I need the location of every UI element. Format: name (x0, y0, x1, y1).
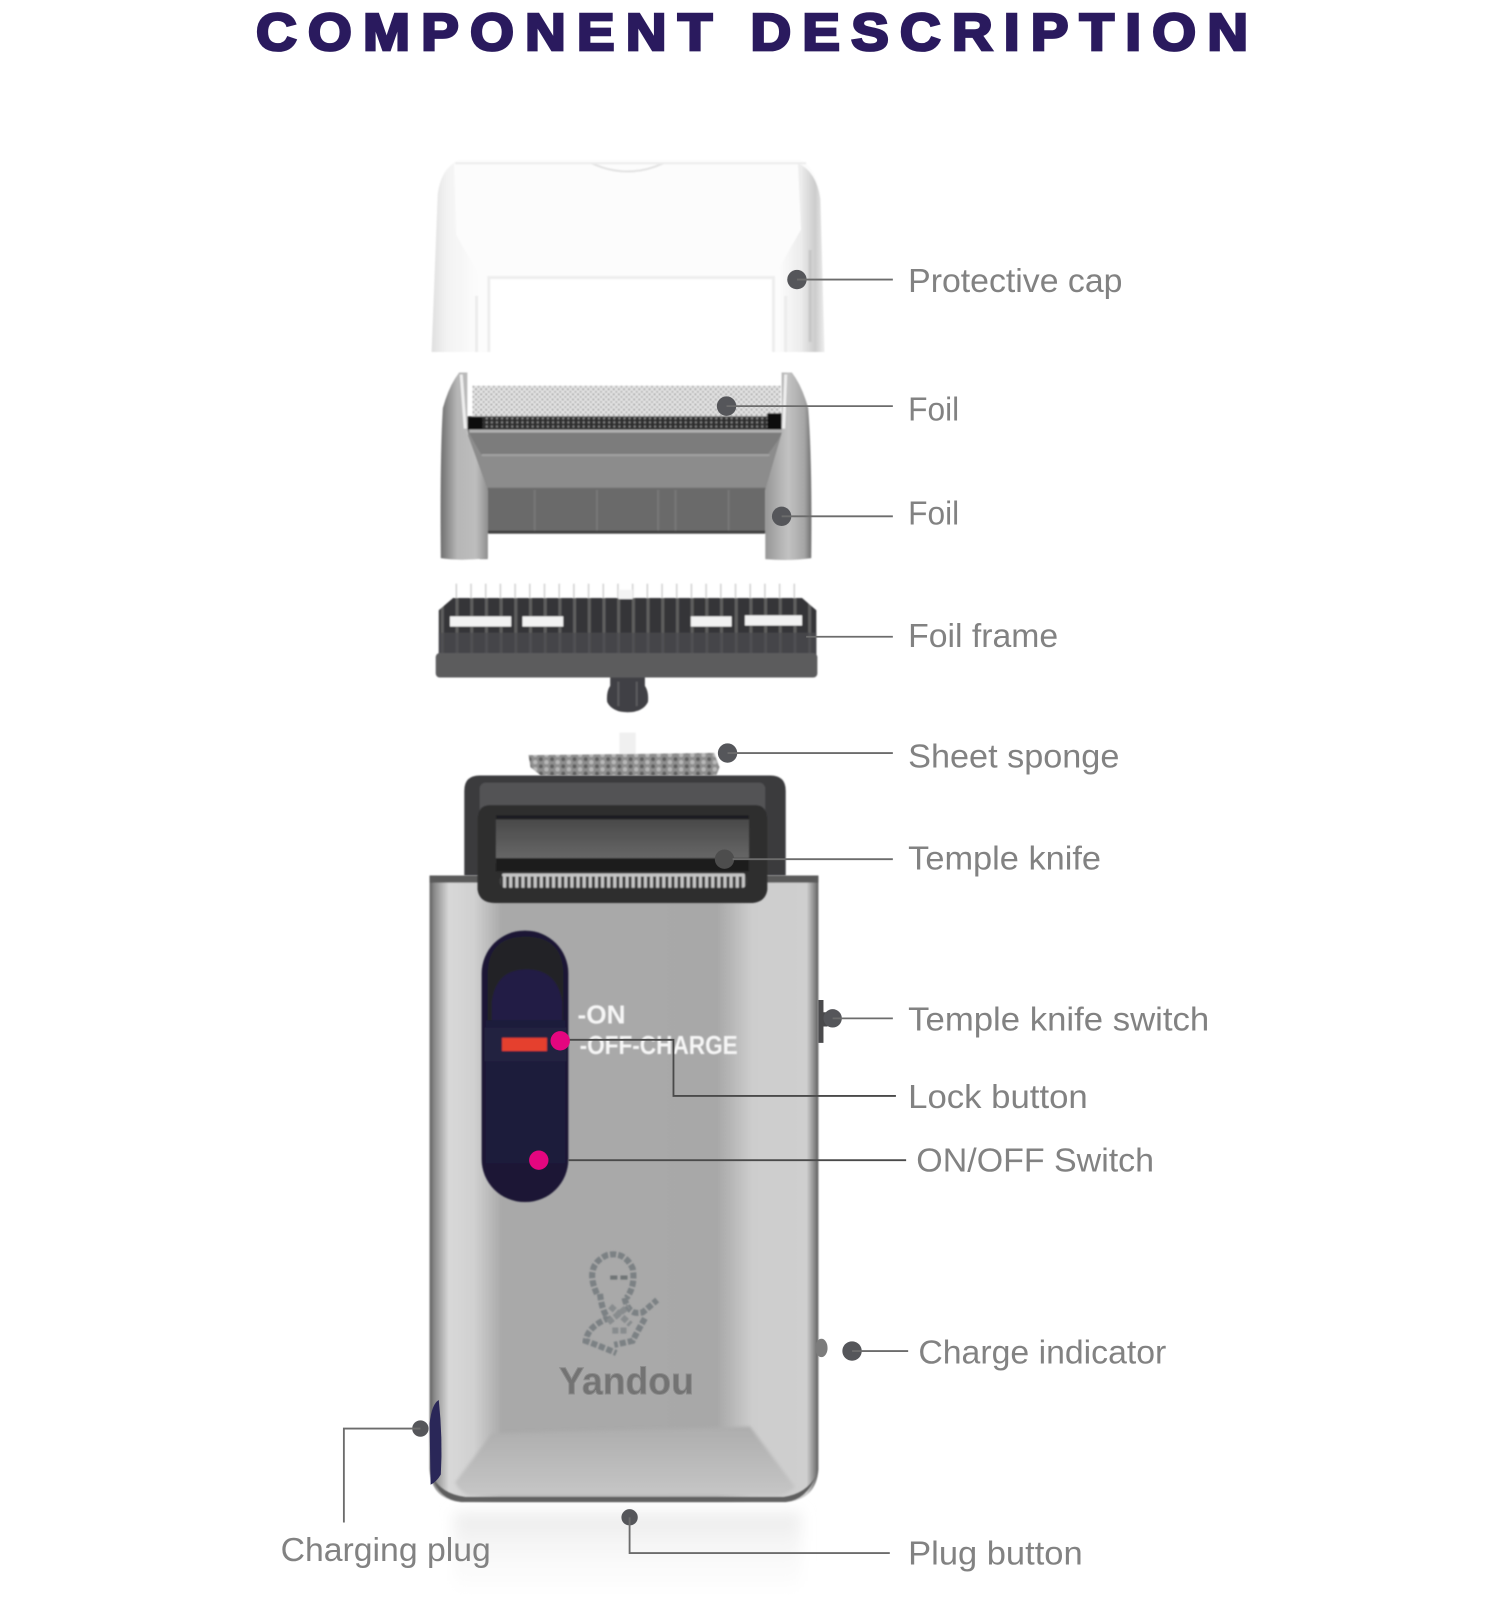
callout: sheet sponge: Sheet sponge (908, 738, 1119, 775)
foil assembly (441, 372, 811, 560)
callout: temple knife (715, 840, 1101, 877)
callout: protective cap (787, 263, 1122, 300)
callout: plug button: Plug button (908, 1535, 1083, 1572)
callout: foil mesh: Foil (908, 391, 959, 428)
callout: foil body: Foil (908, 495, 959, 532)
on and off-charge markings (578, 1001, 738, 1060)
callout: charging plug (281, 1420, 491, 1569)
callout: protective cap: Protective cap (908, 263, 1122, 300)
callout: lock button (551, 1031, 1088, 1116)
shaver body (430, 876, 818, 1502)
brand logo figure (586, 1254, 657, 1353)
callout: foil body (772, 495, 959, 532)
foil tray (467, 430, 784, 559)
callout: temple knife switch: Temple knife switch (908, 1002, 1209, 1039)
callout: on/off switch (529, 1142, 1154, 1179)
on and off-charge markings: -ON (578, 1001, 626, 1029)
foil mesh (472, 386, 781, 418)
charge indicator bump (815, 1339, 828, 1357)
side switch (818, 1000, 828, 1043)
title: COMPONENT DESCRIPTION (256, 4, 1248, 62)
callout: foil frame: Foil frame (908, 618, 1058, 655)
on and off-charge markings: -OFF-CHARGE (580, 1032, 738, 1060)
foil frame (436, 584, 817, 712)
foil side posts (441, 372, 488, 560)
callout: charge indicator: Charge indicator (918, 1334, 1166, 1371)
head unit (464, 776, 786, 903)
callout: temple knife: Temple knife (908, 840, 1101, 877)
callout: sheet sponge (718, 738, 1119, 775)
brand name: Yandou (559, 1360, 694, 1402)
slider switch (482, 931, 568, 1202)
callout: charging plug: Charging plug (281, 1532, 491, 1569)
bevel (455, 1427, 795, 1496)
trimmer comb (500, 874, 747, 888)
callout: lock button: Lock button (908, 1079, 1088, 1116)
callout: plug button (621, 1509, 1083, 1572)
lock indicator (502, 1038, 547, 1051)
charging plug port (430, 1400, 441, 1485)
protective cap (432, 160, 824, 352)
callout: foil mesh (717, 391, 959, 428)
bottom edge (432, 1476, 816, 1502)
reflection (454, 1512, 801, 1596)
sheet sponge (529, 733, 719, 776)
callout: on/off switch: ON/OFF Switch (916, 1142, 1154, 1179)
